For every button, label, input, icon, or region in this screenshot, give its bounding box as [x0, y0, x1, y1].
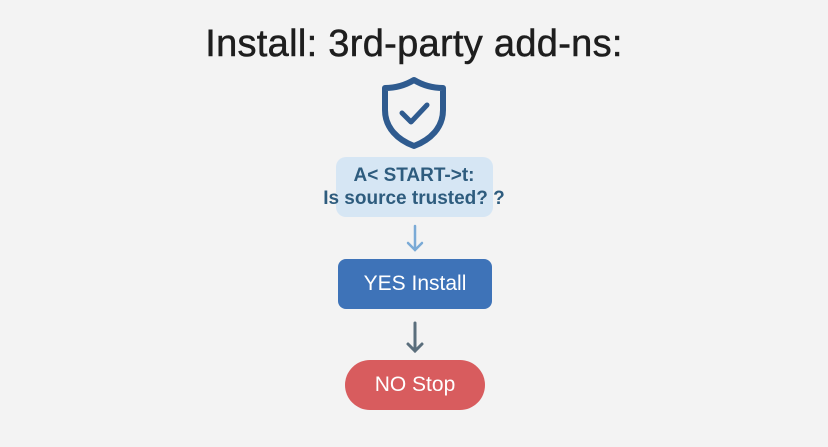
icon: shield [382, 77, 446, 149]
title: Install: 3rd-party add-ns: [205, 23, 623, 65]
start text [323, 165, 505, 209]
no pill [345, 360, 485, 410]
start box [336, 157, 493, 217]
arrow: dark [406, 322, 424, 353]
no pill: NO Stop [375, 373, 455, 396]
yes box: YES Install [364, 272, 466, 295]
arrow: light [406, 224, 424, 252]
start text: Is source trusted? ? [323, 188, 505, 209]
start text: A< START->t: [353, 165, 475, 186]
yes box [338, 259, 492, 309]
